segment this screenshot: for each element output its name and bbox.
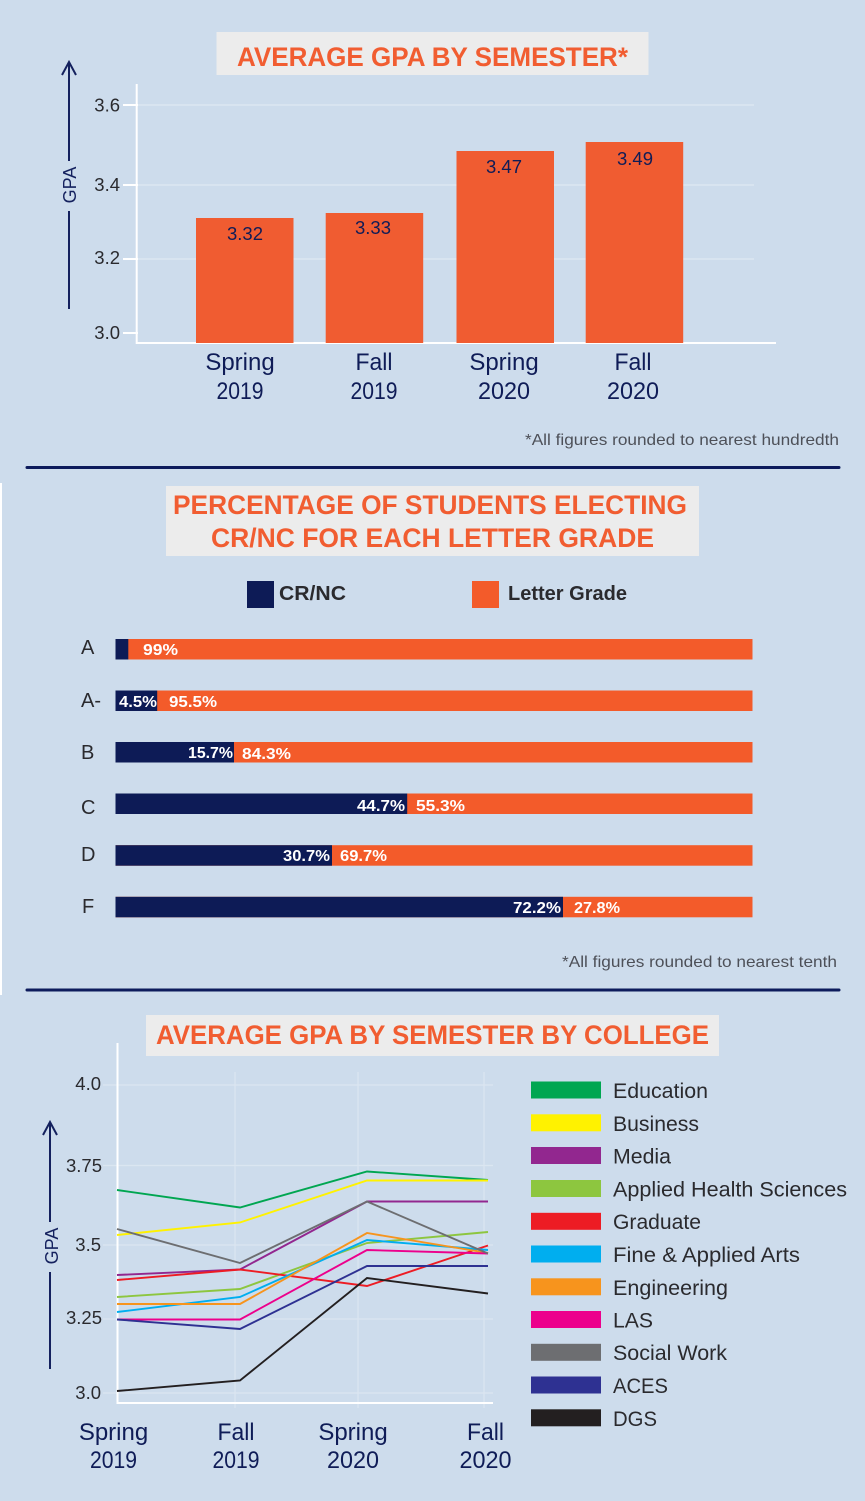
category labels: 2019 [350,378,398,405]
bar: Spring 2019: 3.32 [227,223,263,244]
legend: colleges: Graduate [613,1210,701,1234]
bar chart axes and ticks: 3.0 [94,322,120,343]
line chart category labels: 2020 [327,1447,379,1474]
bar: Spring 2020: 3.47 [486,156,522,177]
line: Business [117,1180,488,1235]
bar chart axes and ticks: 3.2 [94,247,120,268]
stacked bar: B [81,742,752,764]
stacked bar: F [82,896,752,918]
line: Fine and Applied Arts [117,1240,488,1312]
stacked bar: C [81,794,752,819]
legend: colleges: Fine & Applied Arts [613,1243,800,1267]
category labels: Spring [469,349,539,376]
line: Graduate [117,1246,488,1286]
line: Applied Health Sciences [117,1232,488,1297]
panel: average GPA by semester [60,32,839,449]
line chart category labels: Fall [218,1419,254,1446]
line chart category labels: 2020 [460,1447,512,1474]
stacked bar: A-: A- [81,690,101,712]
bar chart axes and ticks: 3.6 [94,94,120,116]
stacked bar: A-: 4.5% [119,694,157,711]
GPA axis arrow: GPA [42,1228,62,1264]
line: Engineering [117,1233,488,1304]
bar: Fall 2020: 3.49 [617,148,653,169]
legend: colleges: DGS [613,1407,657,1431]
category labels: 2020 [607,378,659,405]
bar chart axes and ticks [94,84,776,343]
legend: colleges: Engineering [613,1276,728,1300]
legend: colleges: ACES [613,1374,668,1398]
title: average GPA by semester: AVERAGE GPA BY SEMESTER* [237,42,628,72]
stacked bar: D: 69.7% [340,848,387,865]
line chart category labels: Spring [79,1419,148,1446]
legend: colleges: Social Work [613,1341,727,1365]
category labels [205,349,659,405]
stacked bar: B: 15.7% [188,745,233,762]
legend: CR/NC and letter grade: Letter Grade [508,583,627,605]
line chart category labels: 2019 [212,1447,260,1474]
line chart axes and grid: 4.0 [75,1073,101,1094]
title: percentage of students electing CR/NC [166,486,699,556]
stacked bar: B: 84.3% [242,746,291,763]
legend: CR/NC and letter grade: CR/NC [279,583,346,605]
category labels: 2019 [216,378,264,405]
line: Social Work [117,1202,488,1263]
title: percentage of students electing CR/NC: CR/NC FOR EACH LETTER GRADE [211,523,654,553]
title: GPA by semester by college: AVERAGE GPA BY SEMESTER BY COLLEGE [156,1020,709,1050]
legend: colleges: Media [613,1144,671,1168]
stacked bar: A-: 95.5% [169,694,217,711]
legend: colleges [531,1079,847,1431]
legend: colleges: Business [613,1112,699,1136]
panel: average GPA by semester by college [42,1015,847,1474]
GPA axis arrow [60,62,80,309]
panel: percentage electing CR/NC [81,486,837,971]
line chart axes and grid: 3.25 [66,1307,102,1328]
stacked bar: A: 99% [143,642,178,659]
stacked bar: D: D [81,844,95,866]
stacked bar: D: 30.7% [283,848,330,865]
stacked bar: F: 72.2% [513,900,561,917]
line chart category labels: Fall [467,1419,504,1446]
footnote: rounding to tenth: *All figures rounded to nearest tenth [562,954,837,971]
line chart category labels: 2019 [90,1447,137,1474]
stacked bar: C: 44.7% [357,798,405,815]
category labels: 2020 [478,378,530,405]
bar: Spring 2020 [456,151,554,343]
stacked bar: A: A [81,637,95,659]
stacked bar: A- [81,690,752,712]
stacked bar: F: F [82,896,94,918]
stacked bar: B: B [81,742,94,764]
GPA axis arrow: GPA [60,167,80,203]
footnote: rounding to hundredth: *All figures rounded to nearest hundredth [525,432,839,449]
bar: Fall 2019: 3.33 [355,217,391,238]
legend: colleges: Applied Health Sciences [613,1178,847,1202]
legend: colleges: LAS [613,1308,653,1332]
line chart axes and grid: 3.75 [66,1155,102,1176]
line chart axes and grid: 3.5 [75,1234,101,1255]
line: DGS [117,1278,488,1391]
line: LAS [117,1250,488,1320]
line chart axes and grid: 3.0 [75,1382,101,1403]
bar: Spring 2019 [196,218,294,343]
GPA axis arrow [42,1122,62,1369]
bar: Fall 2019 [326,213,423,343]
bar: Fall 2020 [586,142,683,343]
line: Media [117,1202,488,1275]
line chart category labels [79,1419,512,1474]
category labels: Spring [205,349,275,376]
line chart axes and grid [66,1043,493,1408]
legend: colleges: Education [613,1079,708,1103]
line chart category labels: Spring [318,1419,388,1446]
stacked bar: C: C [81,797,95,819]
legend: CR/NC and letter grade [247,581,627,608]
stacked bar: A [81,637,752,660]
bar chart axes and ticks: 3.4 [94,174,120,195]
stacked bar: C: 55.3% [416,798,465,815]
title: percentage of students electing CR/NC: PERCENTAGE OF STUDENTS ELECTING [173,490,687,520]
category labels: Fall [614,349,652,376]
stacked bar: F: 27.8% [574,900,620,917]
line: ACES [117,1266,488,1329]
category labels: Fall [356,349,392,376]
title: average GPA by semester [216,32,648,75]
line: Education [117,1172,488,1208]
stacked bar: D [81,844,752,866]
